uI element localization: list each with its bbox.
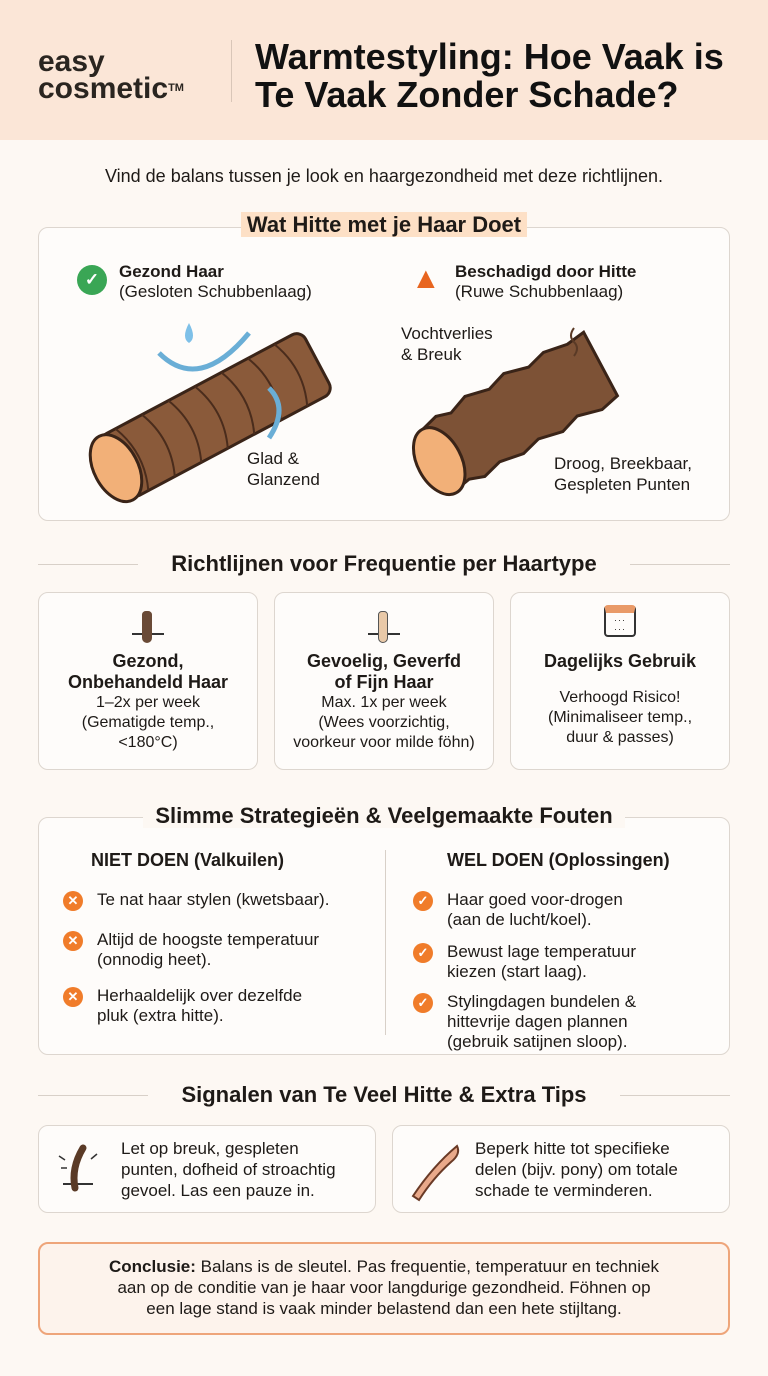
column: don'ts: Herhaaldelijk over dezelfde <box>97 986 302 1005</box>
title <box>255 36 724 115</box>
conclusion box: een lage stand is vaak minder belastend dan een hete stijltang. <box>146 1299 622 1318</box>
damaged label: (Ruwe Schubbenlaag) <box>455 282 623 301</box>
card: signals: Let op breuk, gespleten <box>121 1139 299 1158</box>
callout: dry: Gespleten Punten <box>554 475 690 494</box>
callout: smooth <box>247 449 320 489</box>
heading: strategies: Slimme Strategieën & Veelgemaakte Fouten <box>155 803 613 828</box>
card: sensitive hair <box>274 592 494 770</box>
card: daily use: ··· <box>614 615 626 625</box>
card: sensitive hair: of Fijn Haar <box>334 672 434 692</box>
subtitle: Vind de balans tussen je look en haargezondheid met deze richtlijnen. <box>105 166 663 186</box>
heading: frequency: Richtlijnen voor Frequentie per Haartype <box>171 551 597 576</box>
card: signals: punten, dofheid of stroachtig <box>121 1160 336 1179</box>
illustration: damaged hair <box>412 327 620 496</box>
callout: dry <box>554 454 692 494</box>
conclusion box <box>38 1242 730 1335</box>
healthy label: ✓ <box>85 270 99 289</box>
column: dos: ✓ <box>418 893 428 908</box>
card: signals <box>38 1125 376 1213</box>
card: tip: schade te verminderen. <box>475 1181 653 1200</box>
card: sensitive hair: (Wees voorzichtig, <box>318 714 450 731</box>
card: tip: delen (bijv. pony) om totale <box>475 1160 678 1179</box>
healthy label: Gezond Haar <box>119 262 224 281</box>
healthy label: (Gesloten Schubbenlaag) <box>119 282 312 301</box>
column: dos: ✓ <box>418 945 428 960</box>
conclusion box: Conclusie: Balans is de sleutel. Pas frequentie, temperatuur en techniek <box>109 1257 659 1276</box>
column: don'ts: Te nat haar stylen (kwetsbaar). <box>97 890 329 909</box>
card: healthy hair: <180°C) <box>118 734 178 751</box>
title: Te Vaak Zonder Schade? <box>255 74 678 115</box>
card: sensitive hair: Gevoelig, Geverfd <box>307 651 461 671</box>
column: don'ts: Altijd de hoogste temperatuur <box>97 930 319 949</box>
damaged label: ▲ <box>411 262 441 295</box>
card: daily use: Verhoogd Risico! <box>560 689 680 706</box>
column: don'ts: NIET DOEN (Valkuilen) <box>91 850 284 870</box>
damaged label: Beschadigd door Hitte <box>455 262 636 281</box>
damaged label <box>411 262 636 301</box>
card: healthy hair: 1–2x per week <box>96 694 200 711</box>
column: dos: (gebruik satijnen sloop). <box>447 1032 627 1051</box>
column: don'ts <box>63 850 329 1025</box>
title: Warmtestyling: Hoe Vaak is <box>255 36 724 77</box>
callout: moisture loss <box>401 324 493 364</box>
heading: heat effects: Wat Hitte met je Haar Doet <box>247 212 521 237</box>
column: dos: kiezen (start laag). <box>447 962 587 981</box>
card: daily use: Dagelijks Gebruik <box>544 651 696 671</box>
header band <box>0 0 768 140</box>
card: daily use <box>510 592 730 770</box>
callout: moisture loss: Vochtverlies <box>401 324 493 343</box>
conclusion box: aan op de conditie van je haar voor langdurige gezondheid. Föhnen op <box>117 1278 651 1297</box>
column: dos: ✓ <box>418 995 428 1010</box>
card: healthy hair: Gezond, <box>112 651 184 671</box>
column: dos: Bewust lage temperatuur <box>447 942 636 961</box>
card: sensitive hair: voorkeur voor milde föhn) <box>293 734 475 751</box>
column: don'ts: ✕ <box>68 893 78 908</box>
card: sensitive hair: Max. 1x per week <box>321 694 447 711</box>
callout: smooth: Glad & <box>247 449 299 468</box>
card: daily use: (Minimaliseer temp., <box>548 709 692 726</box>
column: don'ts: pluk (extra hitte). <box>97 1006 224 1025</box>
illustration: healthy hair <box>88 323 332 504</box>
logo <box>38 45 184 105</box>
column: dos: (aan de lucht/koel). <box>447 910 592 929</box>
card: healthy hair <box>38 592 258 770</box>
column: don'ts: ✕ <box>68 989 78 1004</box>
card: daily use: ··· <box>614 624 626 634</box>
card: tip <box>392 1125 730 1213</box>
callout: moisture loss: & Breuk <box>401 345 461 364</box>
column: dos: Haar goed voor-drogen <box>447 890 623 909</box>
column: don'ts: ✕ <box>68 933 78 948</box>
column: dos: hittevrije dagen plannen <box>447 1012 628 1031</box>
panel: strategies <box>38 817 730 1055</box>
column: dos: WEL DOEN (Oplossingen) <box>447 850 670 870</box>
card: tip: Beperk hitte tot specifieke <box>475 1139 670 1158</box>
callout: smooth: Glanzend <box>247 470 320 489</box>
column: dos <box>413 850 670 1051</box>
logo: easy <box>38 45 105 78</box>
logo: cosmeticTM <box>38 72 184 105</box>
column: dos: Stylingdagen bundelen & <box>447 992 636 1011</box>
card: healthy hair: Onbehandeld Haar <box>68 672 228 692</box>
callout: dry: Droog, Breekbaar, <box>554 454 692 473</box>
column: don'ts: (onnodig heet). <box>97 950 211 969</box>
card: signals: gevoel. Las een pauze in. <box>121 1181 315 1200</box>
panel: heat effects <box>38 227 730 521</box>
card: daily use: duur & passes) <box>566 729 674 746</box>
card: healthy hair: (Gematigde temp., <box>82 714 214 731</box>
heading: signals: Signalen van Te Veel Hitte & Extra Tips <box>181 1082 587 1107</box>
healthy label <box>77 262 312 301</box>
